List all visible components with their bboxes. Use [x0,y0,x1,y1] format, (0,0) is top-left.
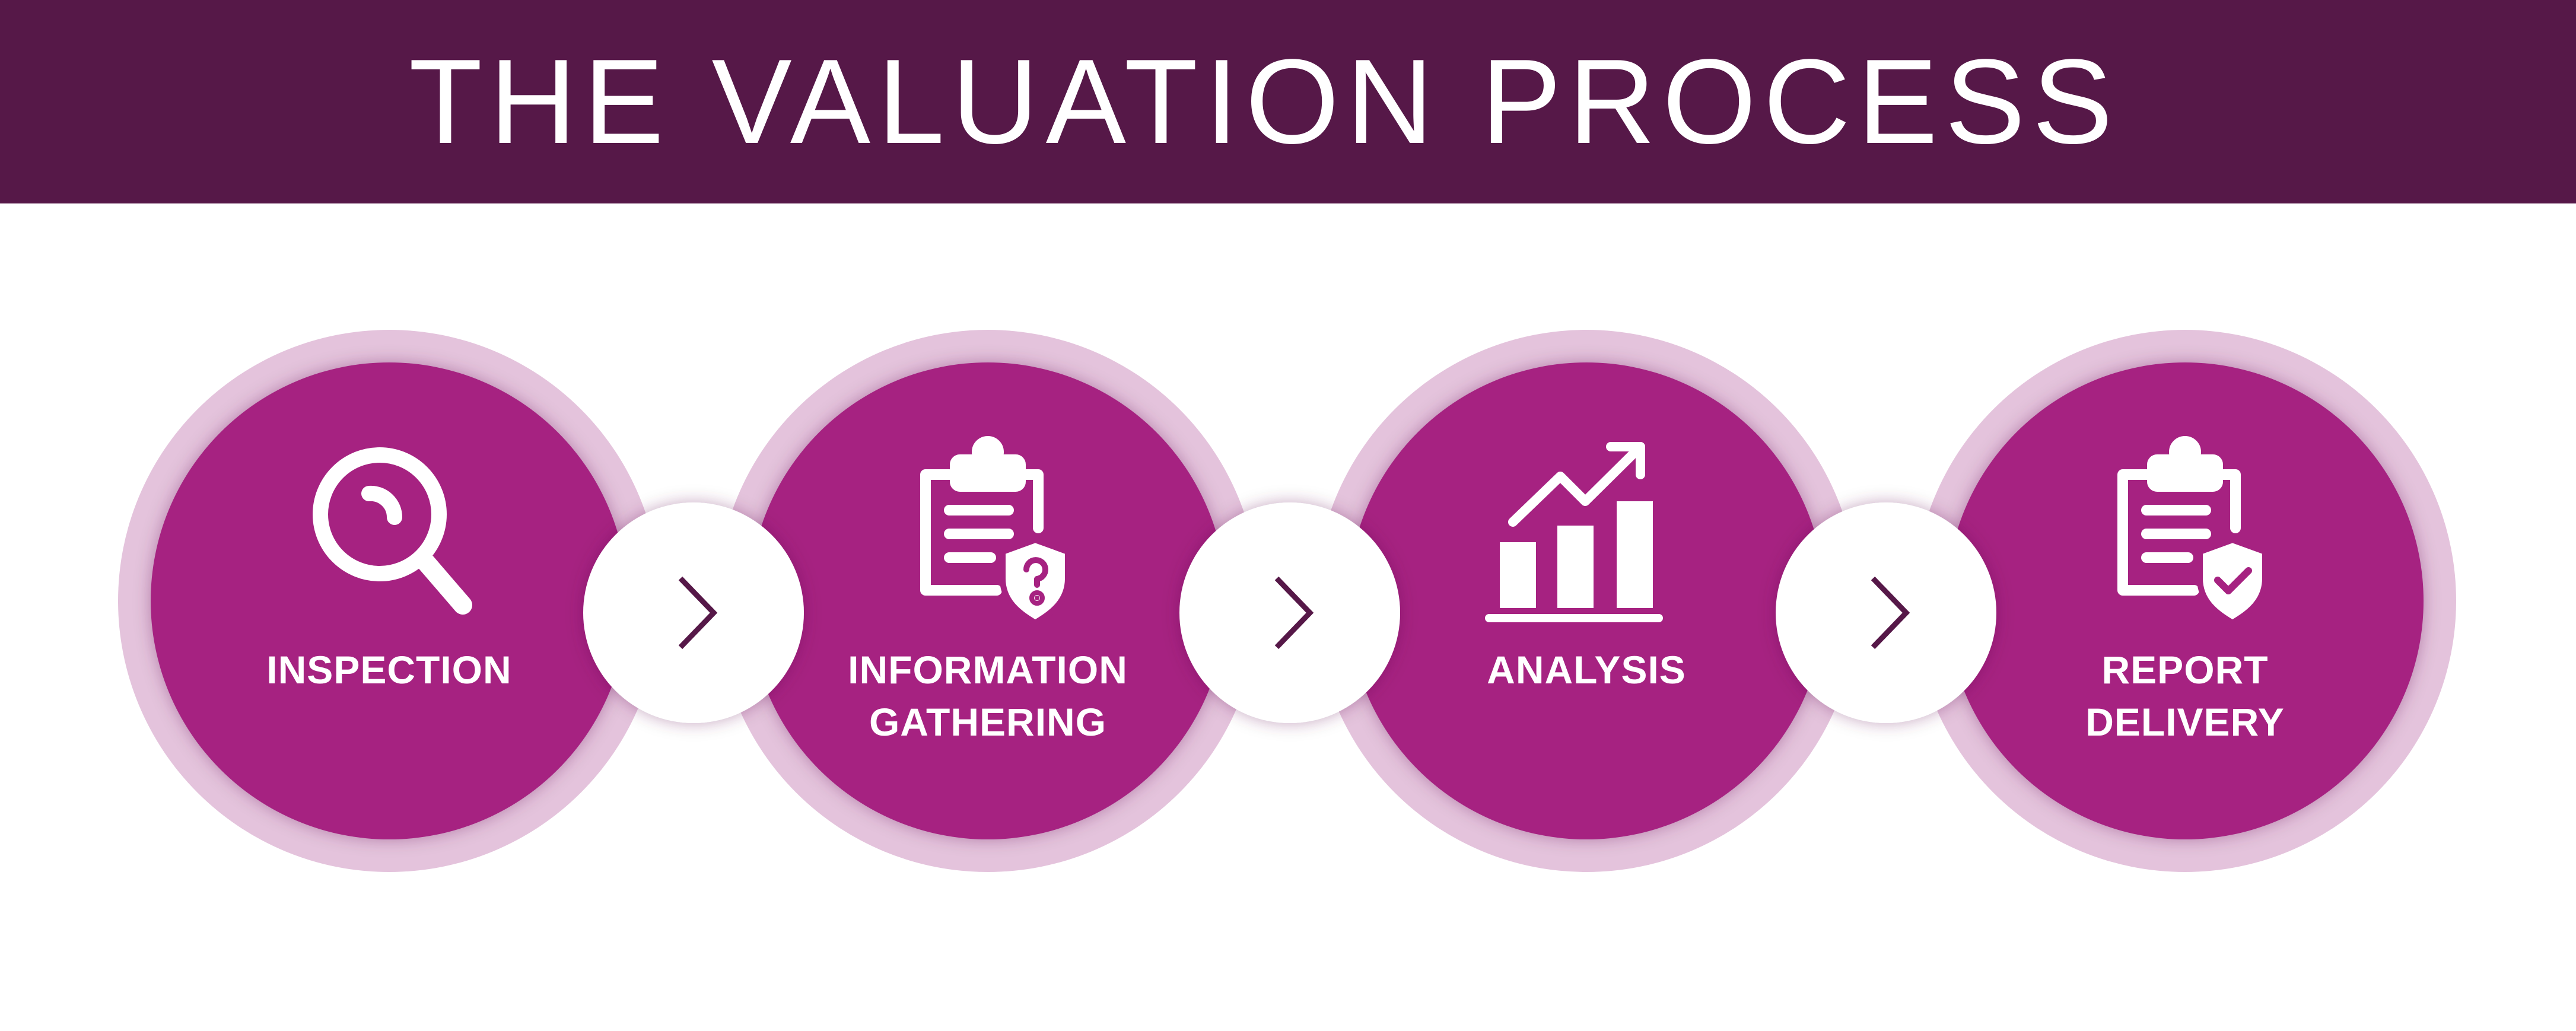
label: inspection: INSPECTION [266,648,512,692]
header band [0,0,2576,203]
step 4: report delivery: DELIVERY [2085,700,2285,744]
step 1: inspection [118,330,660,872]
icon: magnifier [320,455,463,605]
label: analysis: ANALYSIS [1487,648,1686,692]
title: THE VALUATION PROCESS [409,34,2120,169]
step 2: information gathering: GATHERING [869,700,1106,744]
icon: bar chart with rising arrow [1485,447,1663,622]
icon: clipboard with question shield [926,441,1068,623]
arrow 3 [1776,502,1996,723]
label: information gathering: INFORMATION [848,648,1128,692]
arrow 2 [1179,502,1400,723]
step 3: analysis [1315,330,1858,872]
label: report delivery: REPORT [2101,648,2269,692]
step 2: information gathering [717,330,1259,872]
step 4: report delivery [1914,330,2456,872]
icon: clipboard with check shield [2123,441,2265,623]
arrow 1 [583,502,804,723]
